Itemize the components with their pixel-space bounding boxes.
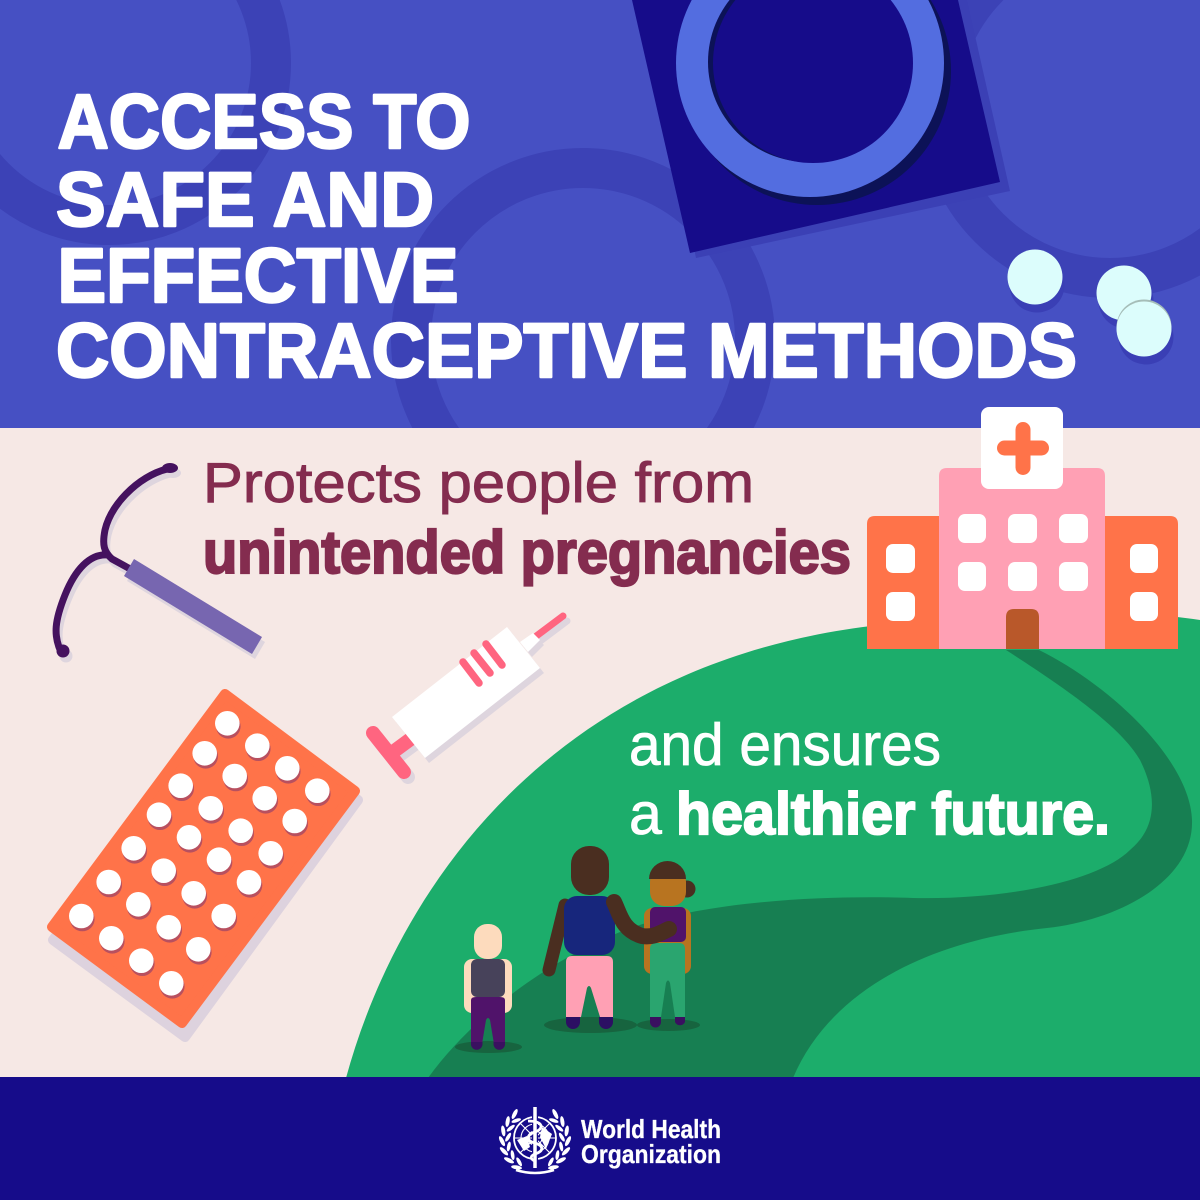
- text: and ensures a healthier future: healthier future.: [676, 781, 1110, 847]
- arm around woman: [614, 902, 669, 936]
- icon: condom packet: [632, 0, 1010, 258]
- figure: adult woman with dark skin: [544, 846, 637, 1033]
- panel: navy footer: [0, 1077, 1200, 1200]
- title: EFFECTIVE: [58, 233, 458, 319]
- logo: World Health Organization wordmark: World Health: [581, 1114, 721, 1144]
- text: protects people from unintended pregnancies: Protects people from: [203, 451, 754, 515]
- icon: floating pills: [1008, 250, 1174, 364]
- icon: contraceptive pill pack: [52, 694, 358, 1037]
- emblem right wreath: [547, 1108, 572, 1170]
- panel: beige middle background: [0, 428, 1200, 1078]
- panel: blue header: [0, 0, 1200, 428]
- logo: World Health Organization wordmark: Organization: [581, 1139, 721, 1169]
- title: CONTRACEPTIVE METHODS: [56, 308, 1077, 394]
- icon: hospital: [867, 407, 1178, 649]
- figure: adult woman with hair bun: [637, 861, 700, 1031]
- emblem left wreath: [498, 1108, 523, 1170]
- title: [56, 79, 1077, 394]
- icon: syringe: [373, 616, 563, 772]
- icon: IUD: [56, 463, 262, 658]
- text: and ensures a healthier future: a: [629, 781, 662, 847]
- text: and ensures a healthier future: [629, 712, 1110, 847]
- figure: child: [455, 924, 522, 1053]
- green hill: [346, 610, 1200, 1078]
- text: protects people from unintended pregnancies: [203, 451, 851, 586]
- title: SAFE AND: [56, 157, 434, 243]
- emblem globe: [514, 1107, 556, 1168]
- emblem wreath ties: [516, 1170, 554, 1173]
- title: ACCESS TO: [58, 79, 470, 165]
- logo: WHO emblem: [498, 1107, 572, 1173]
- text: and ensures a healthier future: and ensures: [629, 712, 941, 778]
- logo: World Health Organization wordmark: [581, 1114, 721, 1169]
- winding road: [428, 650, 1192, 1078]
- text: protects people from unintended pregnancies: unintended pregnancies: [203, 519, 851, 586]
